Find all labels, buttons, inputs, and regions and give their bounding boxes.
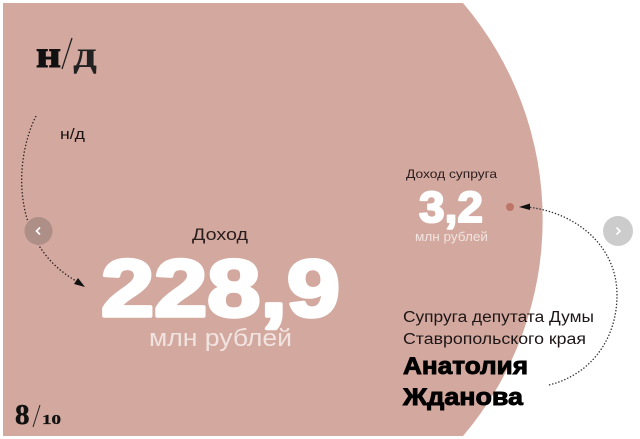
text: income unit: млн рублей — [149, 325, 292, 352]
text: deputy description — [403, 309, 594, 348]
title: no data: н — [36, 34, 61, 76]
heading: deputy name: Жданова — [402, 384, 524, 411]
arrow: dotted arrow to income — [22, 116, 85, 287]
text: spouse income label: Доход супруга — [406, 167, 497, 181]
text: spouse income unit: млн рублей — [415, 230, 488, 244]
heading: deputy name: Анатолия — [403, 353, 528, 380]
text: deputy description: Ставропольского края — [403, 331, 586, 348]
page counter: 8 — [15, 399, 30, 431]
text: no data label: н/д — [60, 126, 85, 143]
heading: deputy name — [402, 353, 528, 411]
text: deputy description: Супруга депутата Думы — [403, 309, 594, 326]
marker dot — [506, 203, 514, 211]
number: spouse income value: 3,2 — [419, 183, 483, 232]
text: income label: Доход — [192, 225, 248, 244]
title: no data: д — [73, 34, 97, 76]
page counter — [15, 399, 61, 431]
button: next — [603, 216, 633, 246]
arrow: dotted arrow to spouse income — [519, 204, 617, 385]
page counter: 10 — [42, 413, 61, 428]
button: previous — [24, 217, 52, 245]
number: income value: 228,9 — [101, 244, 340, 334]
title: no data — [36, 34, 97, 76]
